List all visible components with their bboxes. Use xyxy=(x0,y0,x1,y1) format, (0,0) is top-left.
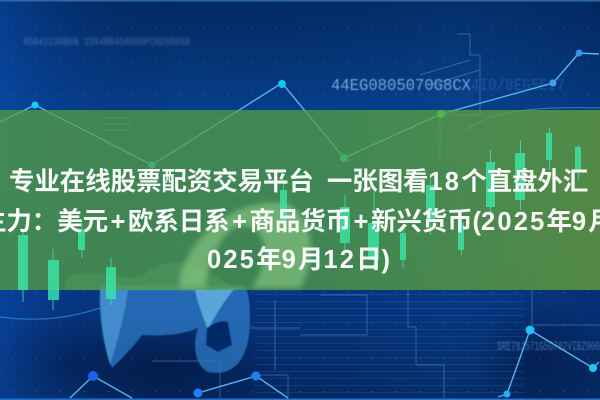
candlestick series xyxy=(18,128,581,310)
globe glow inside band xyxy=(180,203,311,288)
headline line 3 (clipped): 025年9月12日) xyxy=(207,246,390,274)
trend curves xyxy=(0,108,600,319)
headline line 1: 专业在线股票配资交易平台 一张图看18个直盘外汇 xyxy=(9,168,588,196)
background: financial chart artwork: 4I0/8EG5E27 xyxy=(471,77,565,96)
faint data text, top right: 44EG0805070G8CX xyxy=(331,77,471,96)
translucent green band xyxy=(0,110,600,290)
globe swirl xyxy=(65,262,250,373)
faint data text, top left: 4564123AB09 19X4B0456606FC6D5S058 xyxy=(23,37,190,49)
circuit wireframe lines xyxy=(100,34,600,398)
